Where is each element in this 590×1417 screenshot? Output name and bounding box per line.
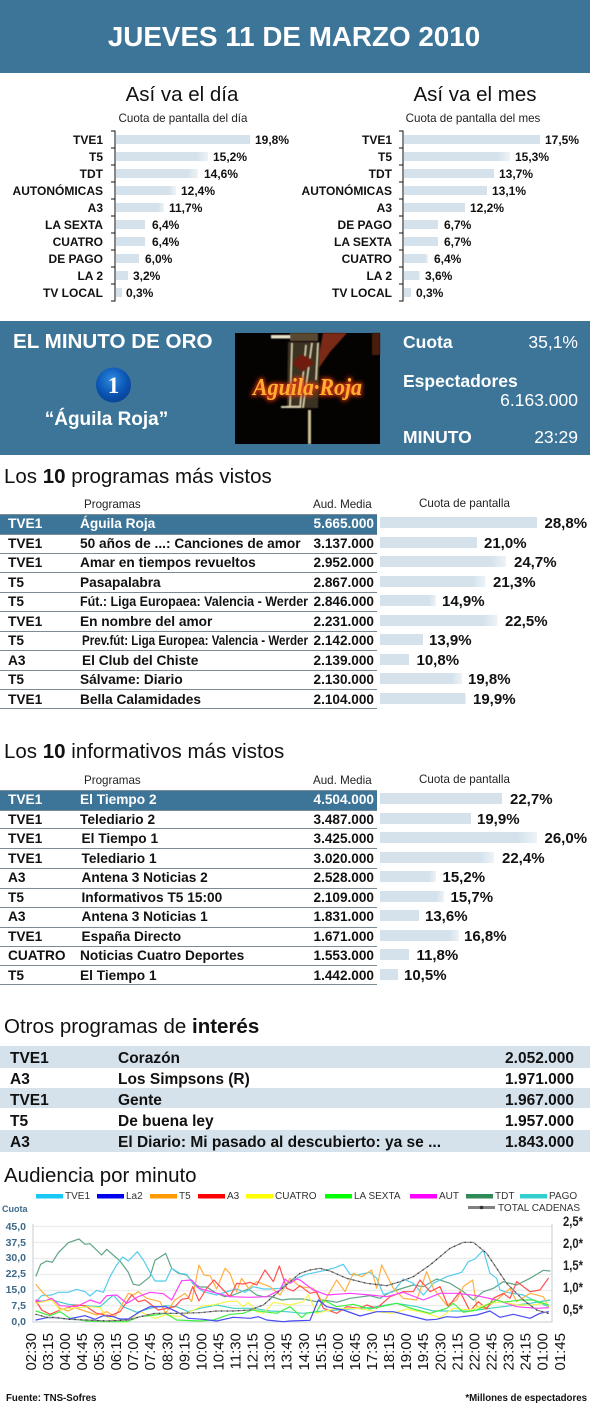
- table: informativos: 1.671.000: [314, 929, 374, 944]
- stat: cuota: [403, 332, 578, 352]
- table: informativos: 3.487.000: [314, 812, 374, 827]
- bar chart: día: 11,7%: [169, 201, 203, 215]
- bar chart: mes: 12,2%: [470, 201, 504, 215]
- time axis: 20:30: [432, 1333, 450, 1371]
- program name: “Águila Roja”: [45, 408, 168, 430]
- table: programas: A3: [8, 653, 26, 668]
- bar chart: día: 12,4%: [181, 184, 215, 198]
- time axis: 17:30: [364, 1333, 381, 1371]
- bar chart: mes: 3,6%: [425, 269, 453, 283]
- bar chart: día: A3: [88, 201, 103, 215]
- table: informativos: Telediario 1: [82, 851, 157, 866]
- table: programas: 5.665.000: [314, 516, 374, 531]
- bar chart: mes: TVE1: [362, 133, 392, 147]
- panel: así va el mes: [302, 83, 579, 301]
- table: programas: [0, 514, 377, 708]
- bar chart: cuota programas: 24,7%: [514, 554, 557, 571]
- table: programas: Fút.: Liga Europaea: Valencia - Werder: [80, 594, 309, 609]
- table: programas: 2.104.000: [314, 692, 374, 707]
- left axis: cuota: 7,5: [11, 1300, 26, 1312]
- table: otros programas: 1.971.000: [505, 1071, 574, 1088]
- time axis: 08:30: [160, 1333, 176, 1371]
- bar chart: cuota programas: 14,9%: [442, 593, 485, 610]
- time axis: 22:00: [466, 1333, 484, 1371]
- left axis: cuota: 30,0: [6, 1252, 26, 1264]
- table: otros programas: 2.052.000: [505, 1050, 574, 1067]
- table: programas: 2.846.000: [314, 594, 374, 609]
- table: otros programas: 1.843.000: [505, 1134, 574, 1151]
- time axis: 07:00: [125, 1333, 142, 1371]
- table: otros programas: El Diario: Mi pasado al descubierto: ya se ...: [118, 1134, 441, 1151]
- time axis: 06:15: [108, 1333, 125, 1371]
- bar chart: mes: A3: [377, 201, 392, 215]
- bar chart: cuota informativos: 10,5%: [404, 967, 447, 984]
- photo: Águila Roja title card: [235, 333, 380, 444]
- left axis: cuota: 22,5: [6, 1268, 26, 1280]
- bar chart: cuota programas: 19,9%: [473, 691, 516, 708]
- bar chart: cuota informativos: [380, 791, 587, 984]
- table: informativos: El Tiempo 1: [82, 831, 158, 846]
- chart legend: [36, 1191, 580, 1214]
- bar chart: mes: AUTONÓMICAS: [302, 183, 392, 198]
- bar chart: mes: T5: [378, 150, 392, 164]
- table: programas: T5: [8, 575, 24, 590]
- table: otros programas: TVE1: [10, 1092, 49, 1109]
- bar chart: mes: TDT: [369, 167, 393, 181]
- table: otros programas: A3: [10, 1071, 30, 1088]
- time axis: 01:45: [552, 1333, 569, 1371]
- stat: espectadores: 6.163.000: [500, 390, 578, 410]
- table: otros programas: 1.957.000: [505, 1113, 574, 1130]
- bar chart: cuota informativos: 16,8%: [464, 928, 507, 945]
- bar chart: día: T5: [89, 150, 103, 164]
- table: informativos: TVE1: [8, 812, 43, 827]
- table: programas: Sálvame: Diario: [80, 672, 183, 687]
- table: otros programas: Los Simpsons (R): [118, 1071, 250, 1088]
- bar chart: día: 15,2%: [213, 150, 247, 164]
- bar chart: día: 6,4%: [152, 235, 180, 249]
- table: informativos: TVE1: [8, 851, 43, 866]
- table: programas: 2.867.000: [314, 575, 374, 590]
- table: informativos: Noticias Cuatro Deportes: [80, 948, 245, 963]
- time axis: 12:15: [244, 1333, 262, 1371]
- time axis: 01:00: [534, 1333, 552, 1371]
- table: programas: Águila Roja: [80, 516, 156, 531]
- column headers: informativos: [84, 773, 510, 787]
- column headers: informativos: Aud. Media: [313, 774, 372, 787]
- right axis: millones: 2,5*: [563, 1214, 584, 1229]
- table: programas: 3.137.000: [314, 536, 374, 551]
- table: informativos: España Directo: [82, 929, 181, 944]
- stat: espectadores: [403, 371, 578, 410]
- time axis: 03:15: [40, 1333, 57, 1371]
- table: informativos: El Tiempo 1: [80, 968, 157, 983]
- table: informativos: 1.553.000: [314, 948, 374, 963]
- left axis: cuota: 15,0: [6, 1284, 26, 1296]
- bar chart: mes: 13,1%: [492, 184, 526, 198]
- time axis: 07:45: [142, 1333, 159, 1371]
- bar chart: cuota programas: 21,3%: [493, 574, 536, 591]
- stat: minuto: [403, 427, 578, 447]
- bar chart: mes: [302, 131, 579, 301]
- footnote: millones: *Millones de espectadores: [465, 1393, 587, 1404]
- line chart: [33, 1224, 552, 1322]
- icon: TVE1 logo: 1: [108, 373, 119, 398]
- column headers: programas: Programas: [84, 498, 141, 511]
- right axis: millones: 1,0*: [563, 1280, 584, 1295]
- table: informativos: 1.831.000: [314, 909, 374, 924]
- bar chart: mes: 15,3%: [515, 150, 549, 164]
- table: informativos: 4.504.000: [314, 792, 374, 807]
- right axis: millones: 1,5*: [563, 1258, 584, 1273]
- bar chart: mes: 6,7%: [444, 235, 472, 249]
- table: programas: 2.139.000: [314, 653, 374, 668]
- bar chart: cuota programas: 28,8%: [544, 515, 587, 532]
- table: informativos: TVE1: [8, 792, 43, 807]
- bar chart: día: 0,3%: [126, 286, 154, 300]
- table: programas: TVE1: [8, 692, 43, 707]
- table: informativos: Informativos T5 15:00: [82, 890, 223, 905]
- bar chart: cuota programas: [380, 515, 587, 708]
- time axis: 19:00: [398, 1333, 415, 1371]
- time axis: 19:45: [415, 1333, 432, 1371]
- bar chart: cuota informativos: 11,8%: [416, 947, 458, 964]
- table: informativos: 3.425.000: [314, 831, 374, 846]
- time axis: 14:30: [296, 1333, 313, 1371]
- panel: los 10 informativos más vistos: [0, 740, 587, 984]
- stat: minuto: 23:29: [534, 427, 578, 447]
- title: JUEVES 11 DE MARZO 2010: [108, 21, 480, 52]
- bar chart: mes: DE PAGO: [338, 218, 392, 232]
- table: programas: 50 años de ...: Canciones de amor: [80, 536, 301, 551]
- bar chart: día: CUATRO: [53, 235, 103, 249]
- column headers: informativos: Cuota de pantalla: [419, 773, 510, 786]
- table: informativos: T5: [8, 890, 24, 905]
- subtitle: mes: Cuota de pantalla del mes: [406, 112, 541, 125]
- time axis: 13:00: [262, 1333, 278, 1371]
- table: programas: Bella Calamidades: [80, 692, 201, 707]
- table: otros programas: 1.967.000: [505, 1092, 574, 1109]
- table: programas: 2.952.000: [314, 555, 374, 570]
- bar chart: mes: TV LOCAL: [332, 286, 392, 300]
- bar chart: mes: 6,7%: [444, 218, 472, 232]
- bar chart: día: TDT: [80, 167, 104, 181]
- table: programas: 2.231.000: [314, 614, 374, 629]
- column headers: programas: Cuota de pantalla: [419, 497, 510, 510]
- bar chart: cuota programas: 13,9%: [429, 632, 472, 649]
- bar chart: día: 3,2%: [133, 269, 161, 283]
- table: informativos: El Tiempo 2: [80, 792, 157, 807]
- table: informativos: 2.528.000: [314, 870, 374, 885]
- table: programas: TVE1: [8, 614, 43, 629]
- time axis: 16:45: [347, 1333, 364, 1371]
- bar chart: día: 14,6%: [204, 167, 238, 181]
- bar chart: día: 6,0%: [145, 252, 173, 266]
- heading: otros programas: Otros programas de interés: [4, 1015, 259, 1038]
- chart legend: La2: [126, 1191, 143, 1202]
- table: programas: 2.142.000: [314, 633, 374, 648]
- table: programas: TVE1: [8, 516, 43, 531]
- table: otros programas: A3: [10, 1134, 30, 1151]
- icon: TVE1 logo: [96, 368, 131, 402]
- right axis: millones: 2,0*: [563, 1236, 584, 1251]
- time axis: 24:15: [518, 1333, 534, 1371]
- time axis: 04:45: [74, 1333, 91, 1371]
- chart legend: LA SEXTA: [354, 1191, 401, 1202]
- chart legend: AUT: [439, 1191, 459, 1202]
- table: otros programas: De buena ley: [118, 1113, 214, 1130]
- table: otros programas: Corazón: [118, 1050, 180, 1067]
- panel: así va el día: [13, 83, 289, 301]
- heading: el minuto de oro: EL MINUTO DE ORO: [13, 330, 212, 353]
- table: informativos: Antena 3 Noticias 1: [82, 909, 208, 924]
- bar chart: día: TVE1: [73, 133, 103, 147]
- photo: Águila Roja title card: Aguila·Roja: [251, 375, 362, 401]
- time axis: 05:30: [91, 1333, 108, 1371]
- table: informativos: Telediario 2: [80, 812, 155, 827]
- table: programas: T5: [8, 672, 24, 687]
- left axis: cuota: [2, 1204, 28, 1328]
- bar chart: mes: 6,4%: [434, 252, 462, 266]
- table: programas: TVE1: [8, 555, 43, 570]
- panel: los 10 programas más vistos: [0, 465, 587, 708]
- panel: audiencia por minuto: [2, 1164, 587, 1404]
- table: otros programas: [0, 1046, 590, 1152]
- time axis: 11:30: [228, 1333, 244, 1369]
- right axis: millones: 0,5*: [563, 1302, 584, 1317]
- time axis: 02:30: [23, 1333, 40, 1371]
- chart legend: T5: [179, 1191, 191, 1202]
- table: programas: El Club del Chiste: [82, 653, 199, 668]
- time axis: 09:15: [176, 1333, 194, 1371]
- time axis: [23, 1333, 569, 1371]
- stat: minuto: MINUTO: [403, 427, 472, 447]
- bar chart: mes: 13,7%: [499, 167, 533, 181]
- time axis: 10:00: [194, 1333, 210, 1371]
- chart legend: TDT: [495, 1191, 514, 1202]
- table: programas: Pasapalabra: [80, 575, 161, 590]
- photo: Águila Roja title card: Aguila·Roja: [251, 375, 362, 401]
- chart legend: PAGO: [549, 1191, 577, 1202]
- table: programas: 2.130.000: [314, 672, 374, 687]
- table: informativos: [0, 790, 377, 984]
- bar chart: día: AUTONÓMICAS: [13, 183, 103, 198]
- bar chart: día: TV LOCAL: [43, 286, 103, 300]
- stat: cuota: 35,1%: [528, 332, 578, 352]
- left axis: cuota: Cuota: [2, 1204, 28, 1214]
- left axis: cuota: 0,0: [11, 1316, 26, 1328]
- panel: el minuto de oro: [0, 321, 590, 455]
- bar chart: cuota programas: 19,8%: [468, 671, 511, 688]
- bar chart: mes: CUATRO: [342, 252, 392, 266]
- table: programas: T5: [8, 594, 24, 609]
- heading: mes: Así va el mes: [413, 83, 537, 106]
- table: programas: Prev.fút: Liga Europea: Valencia - Werder: [82, 633, 309, 648]
- stat: cuota: Cuota: [403, 332, 453, 352]
- bar chart: mes: 0,3%: [416, 286, 444, 300]
- bar chart: cuota informativos: 13,6%: [425, 908, 468, 925]
- chart legend: TOTAL CADENAS: [498, 1203, 580, 1214]
- table: otros programas: TVE1: [10, 1050, 49, 1067]
- bar chart: día: 19,8%: [255, 133, 289, 147]
- stat: espectadores: Espectadores: [403, 371, 518, 391]
- heading: día: Así va el día: [126, 83, 239, 106]
- bar chart: día: LA SEXTA: [45, 218, 103, 232]
- time axis: 23:30: [500, 1333, 518, 1371]
- time axis: 15:15: [313, 1333, 330, 1371]
- bar chart: cuota programas: 21,0%: [484, 535, 527, 552]
- table: otros programas: Gente: [118, 1092, 162, 1109]
- left axis: cuota: 37,5: [6, 1237, 26, 1249]
- chart legend: TVE1: [65, 1191, 90, 1202]
- time axis: 04:00: [57, 1333, 74, 1371]
- bar chart: mes: LA SEXTA: [334, 235, 392, 249]
- bar chart: cuota informativos: 26,0%: [544, 830, 587, 847]
- table: informativos: CUATRO: [8, 948, 66, 963]
- bar chart: cuota programas: 22,5%: [505, 613, 548, 630]
- time axis: 18:15: [381, 1333, 398, 1371]
- bar chart: mes: LA 2: [366, 269, 392, 283]
- time axis: 16:00: [330, 1333, 347, 1371]
- bar chart: cuota informativos: 15,7%: [450, 889, 493, 906]
- table: informativos: T5: [8, 968, 24, 983]
- column headers: programas: Aud. Media: [313, 498, 372, 511]
- bar chart: cuota informativos: 22,7%: [510, 791, 553, 808]
- heading: audiencia: Audiencia por minuto: [4, 1164, 197, 1187]
- heading: programas: Los 10 programas más vistos: [4, 465, 272, 488]
- time axis: 13:45: [278, 1333, 296, 1371]
- subtitle: día: Cuota de pantalla del día: [119, 112, 248, 125]
- bar chart: cuota informativos: 19,9%: [477, 811, 520, 828]
- table: informativos: Antena 3 Noticias 2: [82, 870, 208, 885]
- table: programas: Amar en tiempos revueltos: [80, 555, 256, 570]
- table: informativos: A3: [8, 909, 26, 924]
- table: informativos: TVE1: [8, 831, 43, 846]
- chart legend: A3: [227, 1191, 240, 1202]
- source note: Fuente: TNS-Sofres: [6, 1393, 96, 1404]
- bar chart: cuota informativos: 15,2%: [442, 869, 485, 886]
- time axis: 10:45: [210, 1333, 228, 1371]
- time axis: 21:15: [450, 1333, 466, 1371]
- bar chart: mes: 17,5%: [545, 133, 579, 147]
- chart legend: CUATRO: [275, 1191, 317, 1202]
- bar chart: día: [13, 131, 289, 301]
- bar chart: día: 6,4%: [152, 218, 180, 232]
- bar chart: cuota programas: 10,8%: [416, 652, 459, 669]
- table: programas: TVE1: [8, 536, 43, 551]
- time axis: 22:45: [484, 1333, 500, 1371]
- header banner: [0, 0, 590, 73]
- bar chart: día: DE PAGO: [49, 252, 103, 266]
- panel: otros programas de interés: [0, 1015, 590, 1152]
- column headers: informativos: Programas: [84, 774, 141, 787]
- heading: informativos: Los 10 informativos más vistos: [4, 740, 284, 763]
- table: informativos: 1.442.000: [314, 968, 374, 983]
- bar chart: día: LA 2: [77, 269, 103, 283]
- table: informativos: A3: [8, 870, 26, 885]
- left axis: cuota: 45,0: [6, 1221, 26, 1233]
- right axis: millones: [563, 1214, 584, 1317]
- table: informativos: 2.109.000: [314, 890, 374, 905]
- table: otros programas: T5: [10, 1113, 28, 1130]
- table: programas: En nombre del amor: [80, 614, 213, 629]
- column headers: programas: [84, 497, 510, 511]
- table: programas: T5: [8, 633, 24, 648]
- table: informativos: TVE1: [8, 929, 43, 944]
- bar chart: cuota informativos: 22,4%: [502, 850, 545, 867]
- table: informativos: 3.020.000: [314, 851, 374, 866]
